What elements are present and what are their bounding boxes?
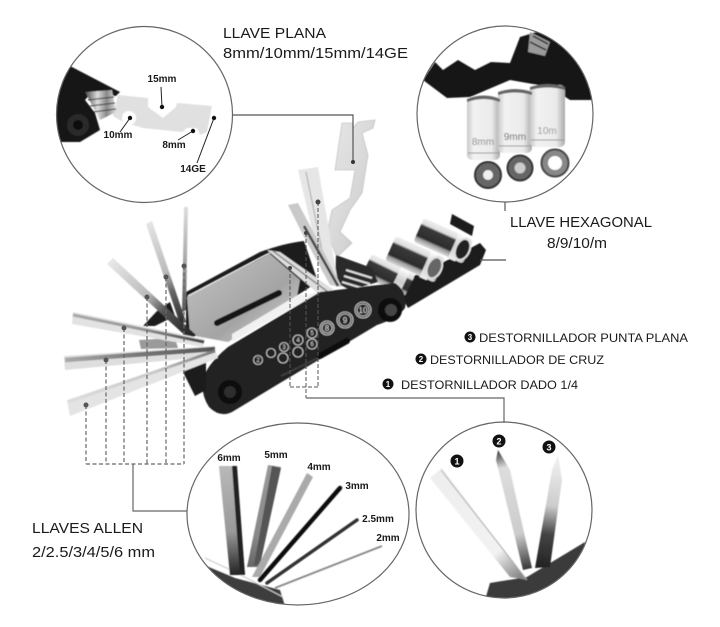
numerals on arm: 6 xyxy=(310,342,314,348)
plate slot xyxy=(217,293,279,323)
upper plate: silver face xyxy=(187,254,300,342)
callout labels xyxy=(104,74,206,175)
sockets photo: 10m xyxy=(537,126,557,137)
numerals on arm xyxy=(256,306,368,364)
callout labels: 15mm xyxy=(148,74,177,85)
label 1: destornillador dado 1/4: DESTORNILLADOR DADO 1/4 xyxy=(401,378,578,392)
bolt lower xyxy=(218,380,242,404)
pivot behind keys xyxy=(183,358,206,396)
connector: sockets xyxy=(480,259,506,261)
white highlight between plate and arm xyxy=(232,292,320,342)
heading: llaves allen xyxy=(32,521,155,561)
heading: llaves allen: 2/2.5/3/4/5/6 mm xyxy=(32,545,155,561)
allen key 2mm xyxy=(182,207,188,312)
callout labels: 14GE xyxy=(180,164,206,175)
tab on holder xyxy=(450,214,474,236)
guide dots: allen keys xyxy=(84,264,186,408)
size rings on arm xyxy=(254,302,371,364)
numbered markers: 3 xyxy=(546,442,552,452)
label 3: destornillador punta plana: 3 xyxy=(468,333,473,342)
allen key 3mm xyxy=(107,258,196,340)
label 2: destornillador de cruz: DESTORNILLADOR DE CRUZ xyxy=(430,353,604,367)
socket 3 xyxy=(413,217,475,265)
numerals on arm: 8 xyxy=(325,324,330,333)
circle outline xyxy=(56,26,232,202)
screwdriver 3 dado xyxy=(267,250,334,295)
size labels: 2.5mm xyxy=(362,514,394,525)
label 1: destornillador dado 1/4: 1 xyxy=(386,380,391,389)
numerals on arm: 4 xyxy=(296,338,300,344)
guide dots: screwdrivers xyxy=(288,200,320,270)
heading: llave hexagonal: 8/9/10/m xyxy=(547,236,607,252)
sockets photo: 8mm xyxy=(472,137,494,148)
callout labels: 8mm xyxy=(162,140,186,151)
wrench blade xyxy=(327,120,375,257)
numbered markers: 2 xyxy=(496,436,502,446)
heading: llave plana: LLAVE PLANA xyxy=(223,26,326,42)
central multi-tool photo xyxy=(64,120,486,416)
heading: llave hexagonal: LLAVE HEXAGONAL xyxy=(510,215,652,231)
ellipse outline xyxy=(187,423,409,605)
socket holder arm xyxy=(395,243,486,308)
socket 1 xyxy=(361,253,416,298)
keys photo xyxy=(204,464,383,604)
screwdriver 2 cross xyxy=(288,203,342,287)
detail ellipse: allen keys xyxy=(180,423,409,606)
allen key 2.5mm xyxy=(146,221,186,324)
numerals on arm: 2 xyxy=(256,358,260,364)
dashed guides: screwdrivers xyxy=(290,202,318,398)
upper plate: black edge xyxy=(186,241,318,338)
label 3: destornillador punta plana: DESTORNILLADOR PUNTA PLANA xyxy=(479,331,688,345)
numerals on arm: 9 xyxy=(343,316,348,325)
detail circle: open-end wrench xyxy=(50,26,232,202)
connector: wrench to detail xyxy=(233,115,355,164)
socket 2 xyxy=(385,235,447,284)
numbered markers: 1 xyxy=(454,456,460,466)
numerals on arm: 5 xyxy=(310,331,314,337)
bolt upper xyxy=(378,298,402,322)
connector: socket circle tick xyxy=(504,202,506,211)
size labels: 4mm xyxy=(307,462,331,473)
screwdriver 1 hex xyxy=(298,167,338,282)
size labels xyxy=(217,450,400,544)
sockets photo: 9mm xyxy=(504,132,526,143)
heading: llave plana xyxy=(223,26,408,62)
heading: llave plana: 8mm/10mm/15mm/14GE xyxy=(223,46,408,62)
size labels: 3mm xyxy=(345,481,369,492)
circle outline xyxy=(417,26,593,202)
wrench photo xyxy=(50,66,212,142)
heading: llaves allen: LLAVES ALLEN xyxy=(32,521,143,537)
size labels: 2mm xyxy=(376,533,400,544)
dashed guides: allen keys xyxy=(86,266,184,464)
numerals on arm: 10 xyxy=(359,306,368,315)
callout lines xyxy=(120,87,214,163)
circle outline xyxy=(416,422,592,598)
ring bundle stripes xyxy=(342,270,372,288)
callout labels: 10mm xyxy=(104,130,133,141)
detail circle: sockets xyxy=(417,26,593,202)
connector: allen keys to detail xyxy=(133,464,187,511)
connector: screwdrivers to detail xyxy=(306,398,504,423)
callout dots xyxy=(128,105,216,133)
numerals on arm: 3 xyxy=(282,345,286,351)
dark hub part xyxy=(143,302,175,326)
allen key 4mm xyxy=(72,312,205,347)
plate highlight line xyxy=(188,253,270,296)
allen key 5mm xyxy=(64,346,216,370)
label 2: destornillador de cruz: 2 xyxy=(419,355,424,364)
lower black arm xyxy=(203,283,406,414)
arm slots xyxy=(320,341,347,356)
ring bundle xyxy=(335,255,378,290)
drivers photo xyxy=(430,450,585,600)
numbered markers xyxy=(450,434,556,468)
sockets photo xyxy=(423,30,592,188)
size labels: 5mm xyxy=(264,450,288,461)
detail circle: screwdrivers xyxy=(416,422,592,600)
allen key 6mm xyxy=(67,350,218,416)
small metal bits xyxy=(139,338,178,349)
size labels: 6mm xyxy=(217,453,241,464)
heading: llave hexagonal xyxy=(510,215,652,252)
